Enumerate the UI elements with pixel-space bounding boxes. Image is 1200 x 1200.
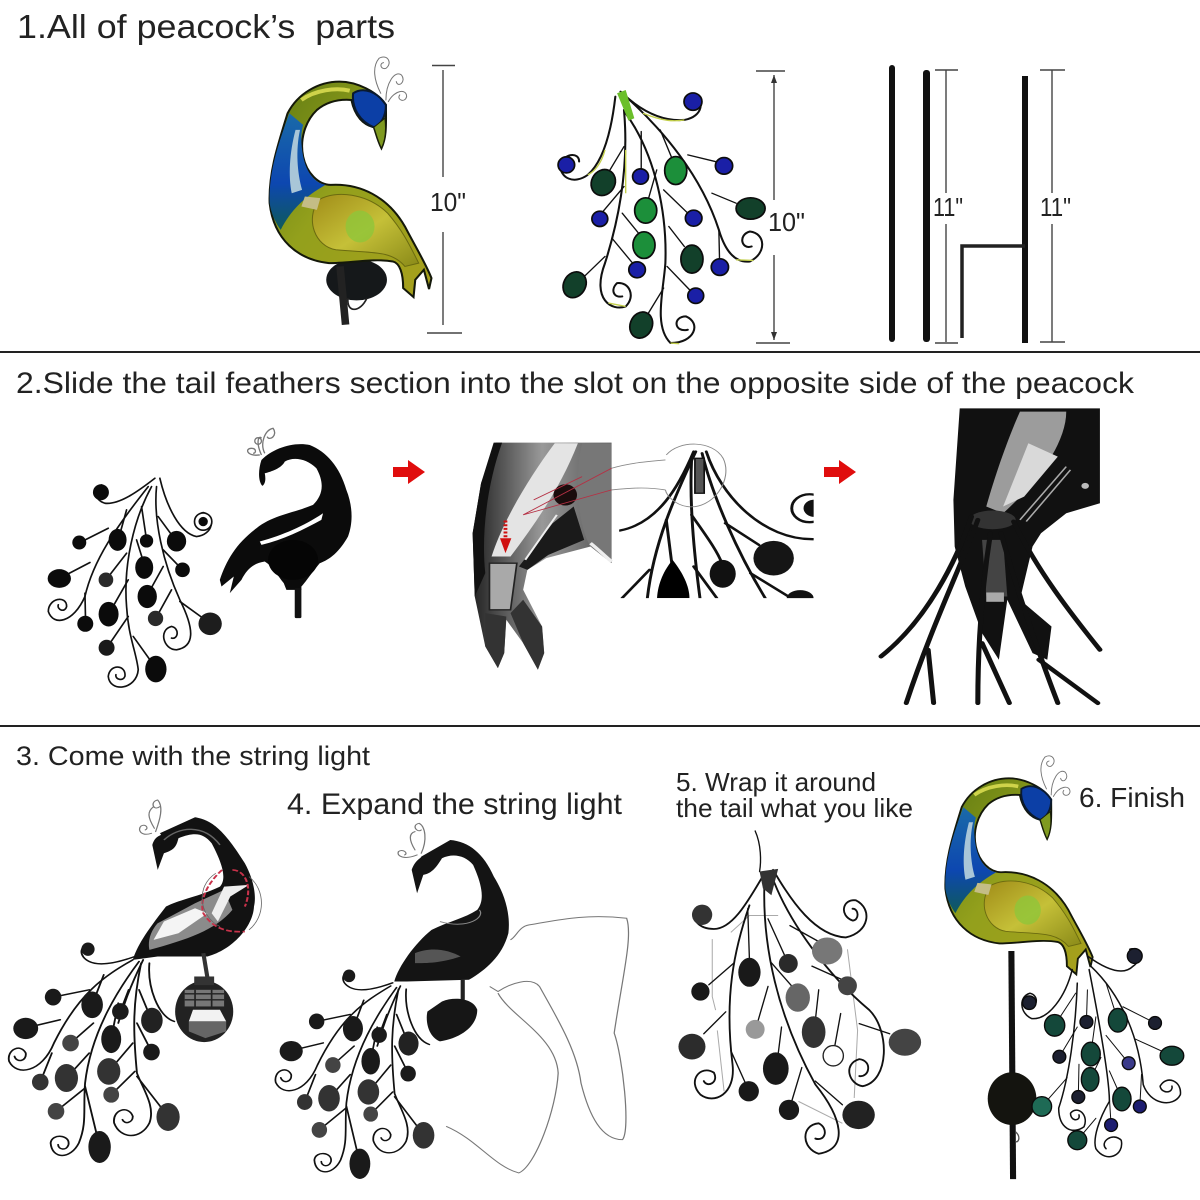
illustration: step 4 peacock with expanded string	[275, 823, 629, 1179]
finished body	[945, 756, 1093, 974]
title: step 3: 3. Come with the string light	[16, 741, 371, 771]
dimension: body 10 inch	[427, 66, 466, 333]
title: step 2: 2.Slide the tail feathers section into the slot on the opposite side of the peacock	[16, 367, 1135, 400]
rod 2 with dimension	[923, 70, 963, 343]
detail: tail joint close-up	[612, 444, 814, 598]
black peacock body	[220, 428, 352, 618]
black tail feathers	[48, 478, 222, 687]
solar ball and stake	[326, 259, 387, 325]
title: step 6: 6. Finish	[1079, 782, 1185, 813]
detail: assembled tail joint	[881, 408, 1100, 703]
coloured peacock body	[270, 57, 431, 325]
rod 1	[889, 65, 895, 342]
title: step 5	[676, 767, 913, 823]
red arrow 1	[393, 460, 425, 484]
title: step 5: the tail what you like	[676, 793, 913, 823]
solar lantern	[175, 953, 233, 1042]
dimension: tail 10 inch	[756, 71, 805, 343]
coloured tail feathers	[558, 90, 765, 344]
finished tail	[1022, 949, 1184, 1157]
stake and solar ball	[988, 951, 1036, 1179]
H-shaped stake with dimension	[962, 70, 1071, 343]
title: step 1: 1.All of peacock’s parts	[17, 8, 395, 45]
rod 2 with dimension: 11"	[933, 192, 963, 222]
H-shaped stake with dimension: 11"	[1040, 192, 1071, 222]
dimension: body 10 inch: 10"	[430, 187, 466, 217]
title: step 4: 4. Expand the string light	[287, 788, 623, 821]
title: step 5: 5. Wrap it around	[676, 767, 876, 797]
red arrow 2	[824, 460, 856, 484]
dimension: tail 10 inch: 10"	[768, 207, 805, 237]
string light wire	[446, 917, 629, 1173]
gems	[558, 93, 765, 341]
illustration: step 6 finished peacock	[945, 756, 1184, 1179]
illustration: step 3 peacock with solar lantern	[9, 800, 261, 1163]
detail: body slot close-up	[473, 443, 612, 670]
illustration: step 5 tail wrapped with string light	[678, 831, 921, 1154]
